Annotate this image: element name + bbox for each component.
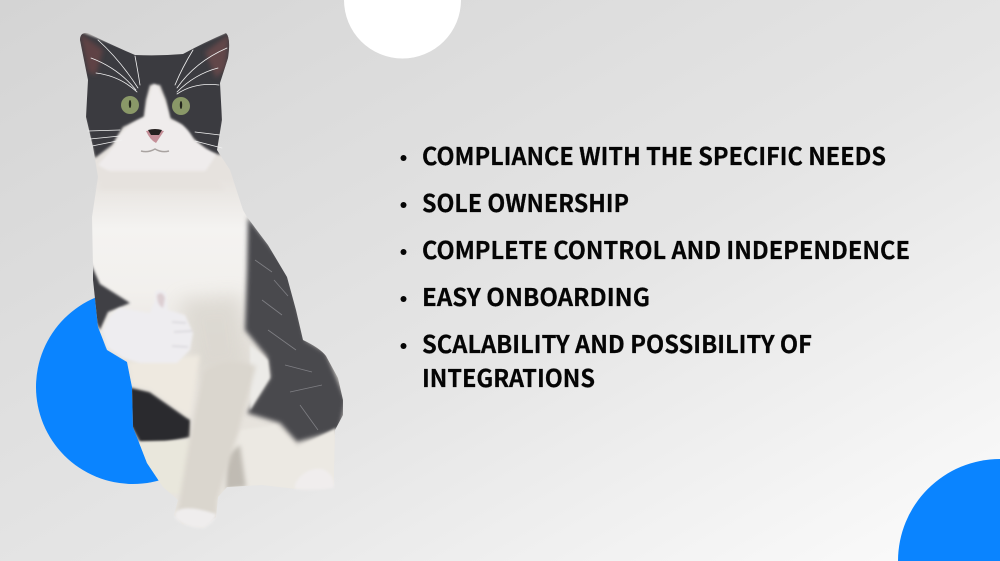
- decorative blue circle bottom right: [898, 459, 1000, 561]
- illustration: tuxedo cat giving a thumbs up: [80, 33, 343, 526]
- under-arm white belly: [128, 355, 200, 418]
- cat foot front: [175, 508, 216, 528]
- dark side near arm: [90, 262, 130, 330]
- decorative blue circle left: [36, 290, 230, 484]
- item: scalability: [400, 325, 812, 394]
- ear inner right: [205, 34, 229, 78]
- dark belly patch: [128, 387, 190, 442]
- dark fur highlights: [255, 260, 322, 430]
- item: onboarding: EASY ONBOARDING: [422, 278, 650, 313]
- cat chin blend: [98, 172, 225, 190]
- bullet list: [400, 137, 910, 394]
- hip white: [306, 427, 336, 444]
- cat body base: [86, 33, 251, 480]
- cat whiskers: [88, 40, 227, 148]
- cat paw thumbs up: [103, 290, 193, 363]
- dark back: [245, 217, 346, 442]
- cat eyes: [121, 96, 190, 115]
- item: control: COMPLETE CONTROL AND INDEPENDENCE: [422, 231, 910, 266]
- cat white muzzle: [98, 84, 216, 172]
- front leg: [178, 364, 256, 514]
- item: scalability: SCALABILITY AND POSSIBILITY OF: [422, 325, 812, 360]
- cat nose and mouth: [141, 129, 169, 152]
- cat foot back: [295, 469, 334, 490]
- white fur streak on back: [250, 345, 270, 410]
- dark head: [76, 30, 232, 158]
- ear inner left: [80, 33, 103, 75]
- item: sole ownership: SOLE OWNERSHIP: [422, 184, 629, 219]
- item: scalability: INTEGRATIONS: [422, 359, 595, 394]
- hip shadow: [226, 445, 246, 490]
- lower belly: [138, 438, 184, 480]
- soft grey centre of body: [180, 292, 246, 368]
- decorative white circle top: [344, 0, 461, 58]
- item: compliance: COMPLIANCE WITH THE SPECIFIC NEEDS: [422, 137, 886, 172]
